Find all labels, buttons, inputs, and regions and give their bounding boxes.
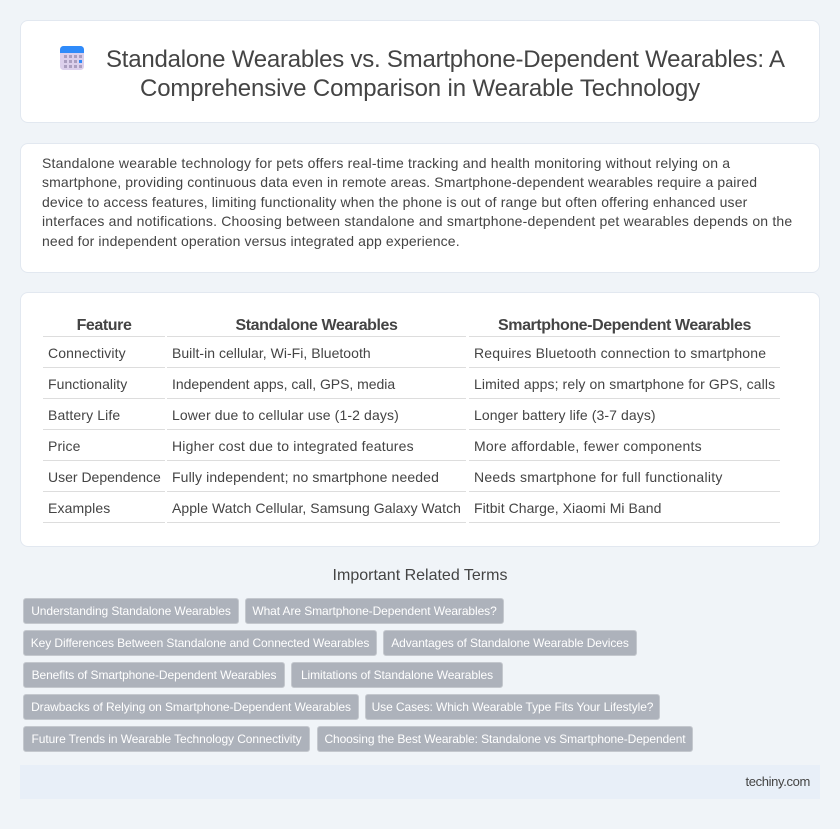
related terms chips bbox=[23, 598, 693, 752]
header row: Smartphone-Dependent Wearables bbox=[498, 317, 751, 334]
title: Standalone Wearables vs. Smartphone-Dependent Wearables: A bbox=[106, 46, 785, 73]
chip bbox=[23, 598, 239, 624]
row: examples: Examples bbox=[48, 500, 110, 516]
intro paragraph: device to access features, limiting functionality when the phone is out of range but often offering enhanced user bbox=[42, 194, 747, 210]
heading: important related terms: Important Related Terms bbox=[333, 567, 507, 584]
row: battery life: Battery Life bbox=[48, 407, 120, 423]
header row: Feature bbox=[77, 317, 131, 334]
comparison table bbox=[43, 317, 780, 523]
chip: Future Trends in Wearable Technology Connectivity bbox=[32, 732, 301, 746]
title: Comprehensive Comparison in Wearable Technology bbox=[140, 75, 700, 102]
comparison table: Built-in cellular, Wi-Fi, Bluetooth bbox=[172, 345, 371, 361]
chip bbox=[245, 598, 504, 624]
chip: Choosing the Best Wearable: Standalone vs Smartphone-Dependent bbox=[324, 732, 686, 746]
comparison table: Requires Bluetooth connection to smartphone bbox=[474, 345, 766, 361]
comparison table: Independent apps, call, GPS, media bbox=[172, 376, 395, 392]
chip: Use Cases: Which Wearable Type Fits Your Lifestyle? bbox=[372, 700, 653, 714]
comparison table: Limited apps; rely on smartphone for GPS, calls bbox=[474, 376, 775, 392]
intro paragraph: need for independent operation versus integrated app experience. bbox=[42, 233, 460, 249]
chip bbox=[23, 630, 377, 656]
row: price: Price bbox=[48, 438, 80, 454]
title bbox=[106, 46, 785, 102]
chip bbox=[23, 694, 359, 720]
comparison table: Higher cost due to integrated features bbox=[172, 438, 414, 454]
comparison table: Lower due to cellular use (1-2 days) bbox=[172, 407, 399, 423]
chip bbox=[291, 662, 503, 688]
chip bbox=[365, 694, 660, 720]
row: connectivity: Connectivity bbox=[48, 345, 126, 361]
chip: Key Differences Between Standalone and Connected Wearables bbox=[31, 636, 369, 650]
row: user dependence: User Dependence bbox=[48, 469, 161, 485]
chip: Drawbacks of Relying on Smartphone-Dependent Wearables bbox=[31, 700, 351, 714]
chip: Advantages of Standalone Wearable Devices bbox=[391, 636, 629, 650]
panel: intro text bbox=[20, 143, 820, 273]
intro paragraph: Standalone wearable technology for pets offers real-time tracking and health monitoring without relying on a bbox=[42, 155, 730, 171]
row: functionality: Functionality bbox=[48, 376, 127, 392]
icon: calendar bbox=[60, 46, 84, 70]
intro paragraph: interfaces and notifications. Choosing between standalone and smartphone-dependent pet wearables depends on the bbox=[42, 213, 792, 229]
comparison table: Fully independent; no smartphone needed bbox=[172, 469, 439, 485]
comparison table: Longer battery life (3-7 days) bbox=[474, 407, 656, 423]
chip bbox=[23, 726, 310, 752]
chip: Benefits of Smartphone-Dependent Wearables bbox=[32, 668, 276, 682]
comparison table: More affordable, fewer components bbox=[474, 438, 702, 454]
panel: comparison table bbox=[20, 292, 820, 547]
comparison table: Needs smartphone for full functionality bbox=[474, 469, 723, 485]
footer source: techiny.com bbox=[745, 774, 810, 789]
intro paragraph bbox=[42, 155, 792, 249]
intro paragraph: smartphone, providing continuous data even in remote areas. Smartphone-dependent wearables require a paired bbox=[42, 174, 757, 190]
header row bbox=[77, 317, 751, 334]
chip: What Are Smartphone-Dependent Wearables? bbox=[252, 604, 497, 618]
header row: Standalone Wearables bbox=[235, 317, 398, 334]
chip: Understanding Standalone Wearables bbox=[31, 604, 231, 618]
chip bbox=[23, 662, 285, 688]
chip: Limitations of Standalone Wearables bbox=[301, 668, 493, 682]
chip bbox=[383, 630, 637, 656]
comparison table: Apple Watch Cellular, Samsung Galaxy Watch bbox=[172, 500, 461, 516]
chip bbox=[317, 726, 693, 752]
comparison table: Fitbit Charge, Xiaomi Mi Band bbox=[474, 500, 661, 516]
panel: header bbox=[20, 20, 820, 123]
footer bbox=[20, 765, 820, 799]
